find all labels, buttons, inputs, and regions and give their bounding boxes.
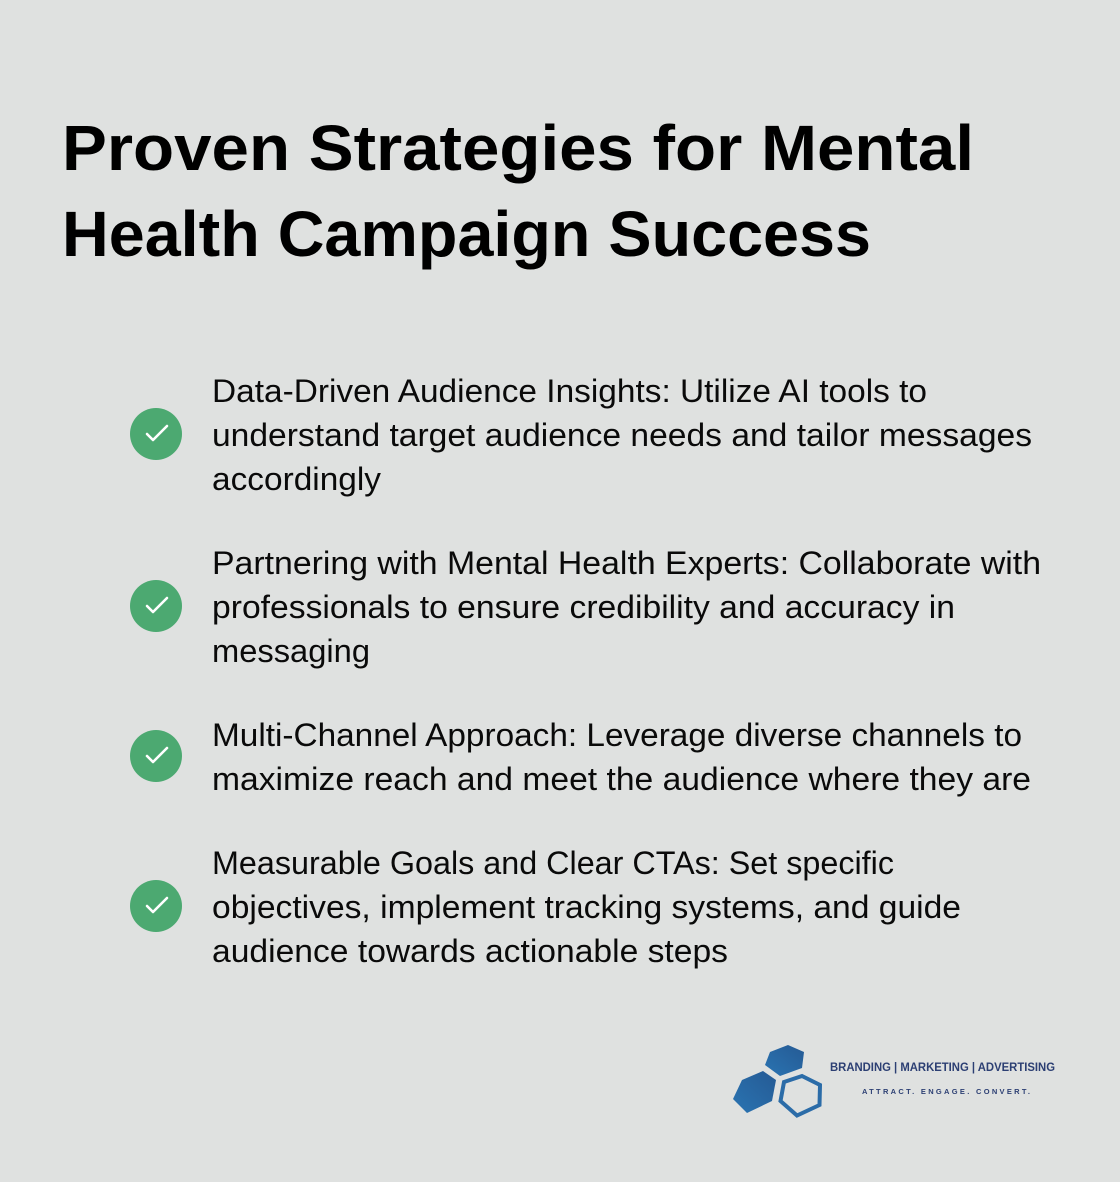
- text: data-driven audience insights: accordingly: [212, 461, 381, 497]
- text: partnering with experts: messaging: [212, 633, 370, 669]
- text: multi-channel approach: maximize reach and meet the audience where they are: [212, 761, 1031, 797]
- title: [62, 112, 974, 270]
- list item 4: [130, 845, 961, 969]
- list item 3: [130, 717, 1031, 797]
- text: data-driven audience insights: understand target audience needs and tailor messages: [212, 417, 1032, 453]
- list item 2: [130, 545, 1041, 669]
- text: measurable goals: [212, 845, 961, 969]
- text: measurable goals: objectives, implement tracking systems, and guide: [212, 889, 961, 925]
- text: data-driven audience insights: [212, 373, 1032, 497]
- title: Health Campaign Success: [62, 198, 871, 270]
- icon: check badge 2: [130, 580, 182, 632]
- icon: check badge 1: [130, 408, 182, 460]
- icon: check badge 4: [130, 880, 182, 932]
- icon: hexagon cluster: [733, 1045, 820, 1116]
- list item 1: [130, 373, 1032, 497]
- title: Proven Strategies for Mental: [62, 112, 974, 184]
- text: partnering with experts: Partnering with Mental Health Experts: Collaborate with: [212, 545, 1041, 581]
- text: multi-channel approach: Multi-Channel Approach: Leverage diverse channels to: [212, 717, 1022, 753]
- text: partnering with experts: [212, 545, 1041, 669]
- icon: check badge 3: [130, 730, 182, 782]
- text: measurable goals: Measurable Goals and Clear CTAs: Set specific: [212, 845, 894, 881]
- logo tagline: ATTRACT. ENGAGE. CONVERT.: [862, 1087, 1030, 1096]
- text: partnering with experts: professionals to ensure credibility and accuracy in: [212, 589, 955, 625]
- logo tagline: BRANDING | MARKETING | ADVERTISING: [830, 1062, 1055, 1074]
- text: measurable goals: audience towards actionable steps: [212, 933, 728, 969]
- logo: [733, 1045, 1055, 1116]
- logo tagline: [830, 1062, 1055, 1096]
- text: multi-channel approach: [212, 717, 1031, 797]
- text: data-driven audience insights: Data-Driven Audience Insights: Utilize AI tools to: [212, 373, 927, 409]
